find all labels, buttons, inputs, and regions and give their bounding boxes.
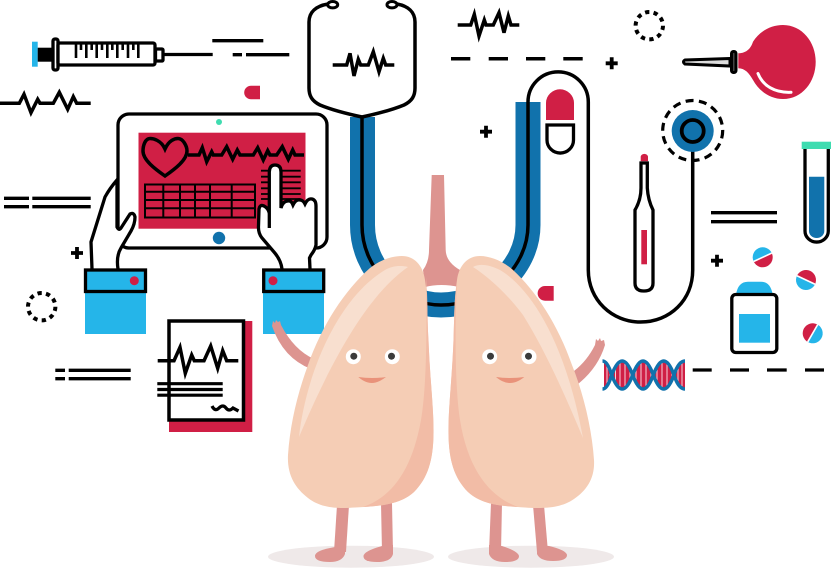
stethoscope tube: black line with chest piece link [362,72,693,322]
right lung shading [448,283,518,507]
left lung [288,256,434,508]
left sleeve [85,270,146,334]
heartbeat line: left [0,92,91,113]
stethoscope headset [309,1,415,117]
dashed line: top [451,57,583,60]
dash lines near syringe [212,41,289,55]
left lung highlight [299,266,408,437]
right lung highlight [473,265,583,438]
medicine bottle [732,282,777,352]
double lines: right [711,213,777,222]
thermometer [635,154,653,291]
legs and feet [315,503,567,562]
trachea [423,175,460,287]
left lung face [346,349,400,383]
dotted circle: left [28,293,55,320]
plus: right [711,255,723,267]
plus: left [71,247,83,259]
double lines: lower left [55,370,131,379]
plus: top right [606,57,618,69]
right lung face [482,349,536,383]
pill: round one [749,244,776,271]
pill: round three [799,320,826,347]
dashed line: lower right [693,368,824,372]
heart icon [143,138,187,176]
right arm [574,338,605,384]
capsule pill [546,89,574,153]
test tube [802,142,831,242]
tablet data table [145,184,255,218]
right hand pointing [258,165,316,269]
double lines: left [4,198,91,207]
DNA helix [602,360,685,390]
red pill: lower [538,286,554,301]
left hand [91,180,135,269]
red pill: top [244,86,260,99]
right lung [448,256,594,508]
plus: centre [480,126,492,138]
dotted circle: top [636,12,663,39]
tablet [118,114,327,248]
left lung shading [363,277,434,507]
stethoscope tube: blue [362,102,528,305]
left arm [272,320,314,369]
ground shadows [268,546,614,568]
syringe [32,39,213,70]
tablet heartbeat line [188,147,304,162]
rubber bulb syringe [684,25,816,99]
pill: round two [793,267,819,293]
right sleeve [263,270,324,334]
medical chart document [157,321,252,432]
tablet screen [138,133,306,229]
stethoscope chest piece [663,100,723,160]
tablet list lines [261,171,301,199]
heartbeat line: top centre [458,13,519,36]
